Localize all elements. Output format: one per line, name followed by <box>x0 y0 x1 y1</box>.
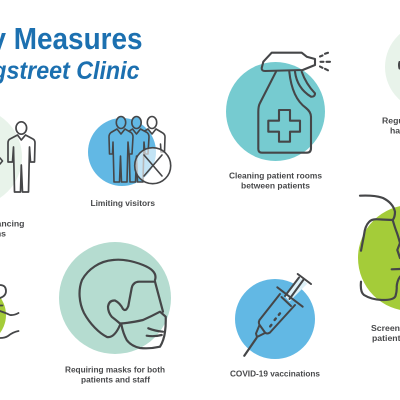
icon: partial hand <box>0 285 18 338</box>
icon: screening circle <box>358 205 400 311</box>
icon: head profile <box>360 196 400 300</box>
label: screening patients <box>371 323 400 343</box>
panel: COVID-19 vaccinations <box>230 274 320 378</box>
label: hand hygiene <box>382 116 400 136</box>
panel: partial hand icon <box>0 285 18 345</box>
label: limiting visitors: Limiting visitors <box>90 198 155 208</box>
panel: cleaning rooms <box>226 53 330 191</box>
icon: partial green circle <box>0 285 6 345</box>
panel: social distancing <box>0 108 35 238</box>
label: social distancing <box>0 218 24 238</box>
panel: limiting visitors <box>88 116 171 208</box>
icon: masks circle <box>59 242 171 354</box>
icon: masked head <box>80 260 166 348</box>
icon: social distancing circle <box>0 108 22 206</box>
icon: no entry cross <box>135 148 171 184</box>
panel: screening patients <box>358 196 400 343</box>
title <box>0 22 143 85</box>
icon: three people <box>109 116 165 182</box>
label: cleaning rooms: Cleaning patient rooms <box>229 170 322 180</box>
icon: visitors circle <box>88 118 156 186</box>
icon: spray bottle <box>258 53 330 153</box>
icon: hand hygiene circle <box>385 23 400 111</box>
icon: person <box>8 122 35 192</box>
label: requiring masks: patients and staff <box>81 374 150 384</box>
label: cleaning rooms <box>229 170 322 190</box>
icon: syringe <box>244 274 311 356</box>
label: requiring masks: Requiring masks for both <box>65 364 165 374</box>
panel: hand hygiene <box>382 23 400 136</box>
label: COVID-19 vaccinations: COVID-19 vaccinations <box>230 368 320 378</box>
icon: hand fragment <box>398 62 400 68</box>
icon: vaccination circle <box>235 279 315 359</box>
label: requiring masks <box>65 364 165 384</box>
panel: requiring masks <box>59 242 171 384</box>
label: cleaning rooms: between patients <box>241 180 310 190</box>
icon: cleaning circle <box>226 62 325 161</box>
icon: distance arrow <box>0 158 2 164</box>
